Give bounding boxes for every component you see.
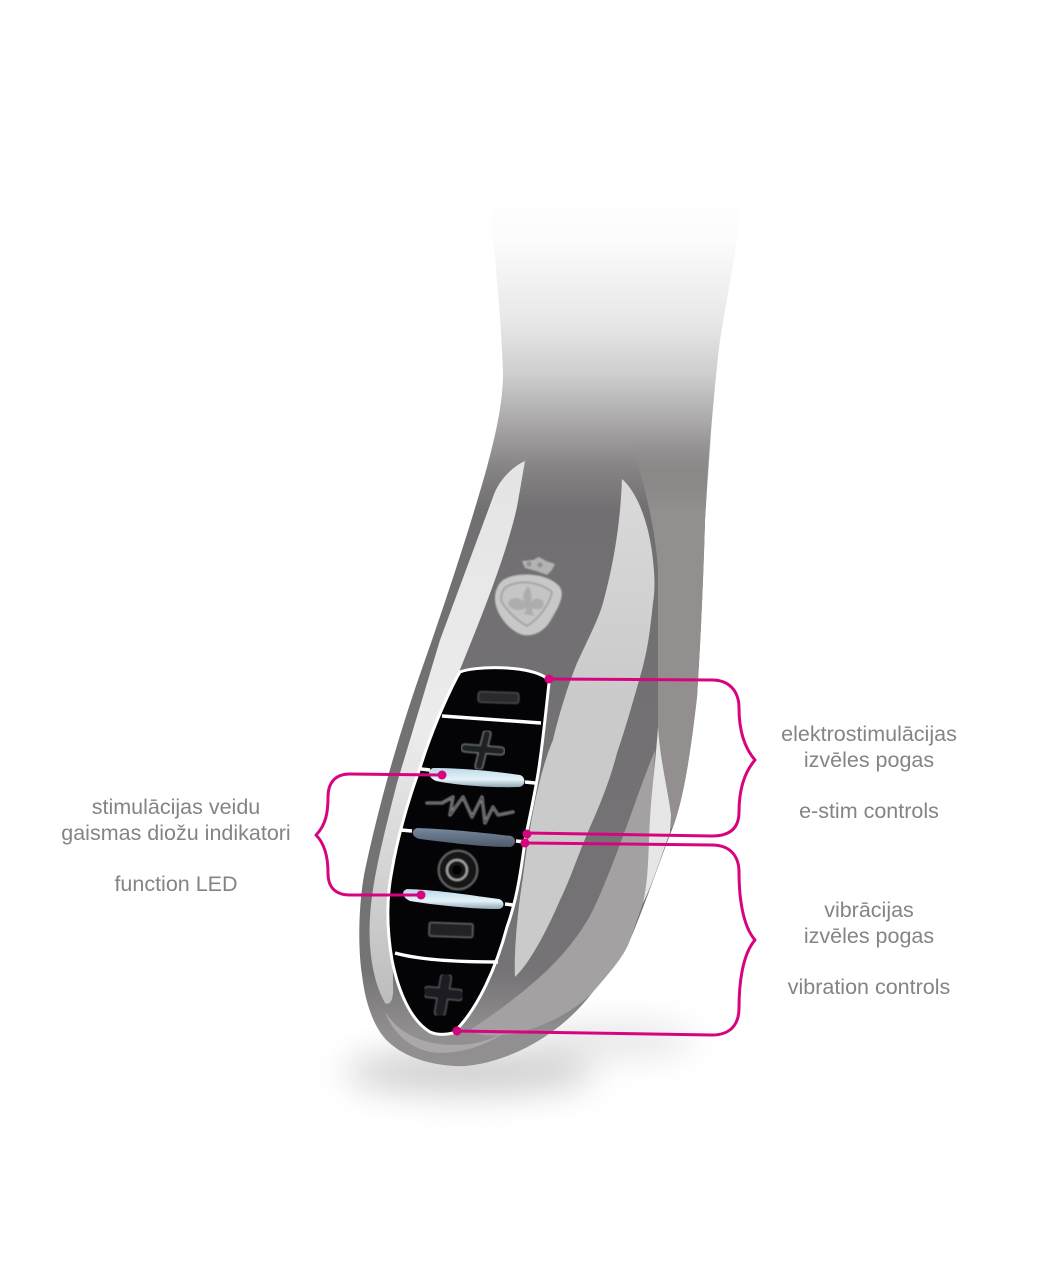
- device body: [359, 150, 745, 1066]
- icon: minus bottom: [429, 922, 473, 938]
- label: vibration: [788, 898, 950, 999]
- fleur-de-lis: [508, 586, 544, 616]
- label: e-stim: e-stim controls: [799, 799, 939, 823]
- label: LED: function LED: [114, 872, 238, 896]
- right edge highlight: [643, 727, 671, 903]
- label: LED: stimulācijas veidu: [92, 795, 260, 819]
- device illustration: [359, 150, 745, 1066]
- floor shadow: [345, 1024, 695, 1094]
- label: LED: gaismas diožu indikatori: [61, 821, 291, 845]
- label: e-stim: elektrostimulācijas: [781, 722, 957, 746]
- logo crest: [495, 557, 562, 635]
- icon: plus top: [465, 734, 501, 766]
- label: e-stim: izvēles pogas: [804, 748, 934, 772]
- callout dots: [416, 674, 554, 1036]
- body lower-right light area: [470, 750, 655, 1036]
- bottom rim highlight: [385, 1012, 505, 1053]
- label: vibration: izvēles pogas: [804, 924, 934, 948]
- icon: minus top: [478, 691, 519, 704]
- LED top: [429, 768, 524, 787]
- left light strip: [370, 461, 525, 1004]
- callout: vibration bracket: [457, 843, 755, 1035]
- icon: pulse wave: [427, 797, 513, 823]
- icon: plus bottom: [428, 978, 459, 1012]
- control panel: [388, 668, 549, 1034]
- callout: LED bracket: [316, 774, 442, 895]
- label: vibration: vibration controls: [788, 975, 950, 999]
- LED middle: [413, 828, 515, 847]
- callout: e-stim bracket: [316, 679, 755, 1035]
- label: e-stim: [781, 722, 957, 823]
- label: vibration: vibrācijas: [824, 898, 914, 922]
- right band: [628, 430, 712, 830]
- LED bottom: [403, 889, 504, 909]
- label: LED: [61, 795, 291, 896]
- icon: circle power button: [438, 850, 478, 890]
- panel dividers: [395, 716, 541, 962]
- right light strip: [515, 479, 654, 977]
